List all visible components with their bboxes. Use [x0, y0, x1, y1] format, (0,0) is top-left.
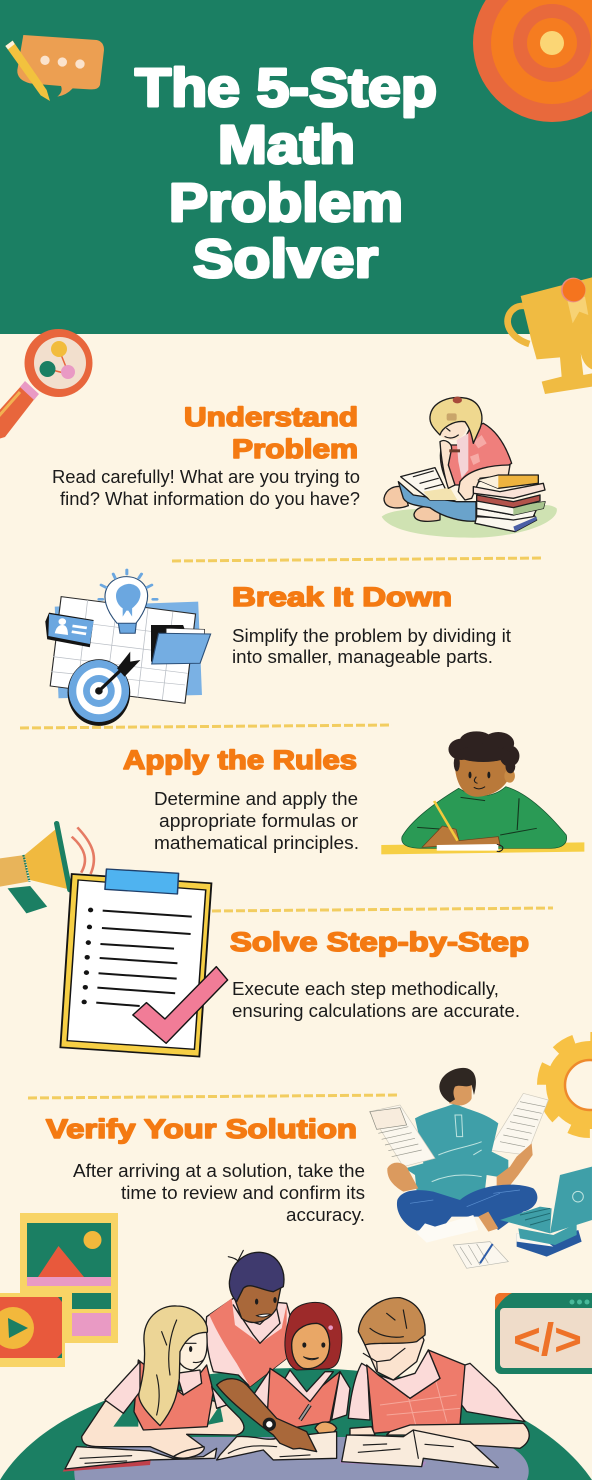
student: dark-haired boy	[206, 1250, 290, 1387]
divider: dashed line 4	[28, 1095, 400, 1098]
heading: solve step by step: Solve Step-by-Step	[230, 927, 529, 957]
student: boy with glasses	[348, 1298, 529, 1448]
illustration: boy writing at desk	[381, 731, 584, 854]
title	[135, 58, 437, 289]
panel: step 5 verify your solution	[46, 1068, 592, 1268]
text: step 3 description: Determine and apply the	[154, 789, 358, 809]
text: step 2 description: into smaller, manageable parts.	[232, 647, 493, 667]
book: centre	[217, 1432, 337, 1460]
text: step 5 description: accuracy.	[286, 1205, 365, 1225]
title: Problem	[169, 173, 403, 233]
icon: code window	[495, 1293, 592, 1374]
panel: step 4 solve step by step	[60, 869, 529, 1057]
text: step 2 description	[232, 626, 511, 667]
icon: megaphone	[0, 823, 94, 913]
text: step 5 description: time to review and confirm its	[121, 1183, 365, 1203]
icon: image card	[20, 1213, 118, 1343]
student: red-haired girl	[253, 1302, 350, 1436]
title: Solver	[193, 229, 378, 289]
illustration: girl reading with book stack	[382, 397, 557, 538]
arm and hand pointing with wristwatch	[217, 1379, 317, 1452]
text: step 5 description	[73, 1161, 365, 1225]
table: grey-purple top	[74, 1437, 529, 1480]
icon: trophy	[508, 277, 592, 394]
illustration: four students studying at table	[0, 1250, 592, 1480]
illustration: person reviewing papers with laptop	[369, 1068, 592, 1268]
text: step 5 description: After arriving at a solution, take the	[73, 1161, 365, 1181]
title: The 5-Step	[135, 58, 437, 118]
open books on table	[63, 1430, 498, 1472]
heading: understand problem: Understand	[184, 402, 358, 432]
title: Math	[218, 115, 355, 175]
heading: apply the rules: Apply the Rules	[123, 745, 357, 775]
heading: understand problem	[184, 402, 358, 464]
heading: verify your solution: Verify Your Solution	[46, 1114, 357, 1144]
icon: gear	[542, 1037, 592, 1133]
panel: step 2 break it down	[45, 570, 511, 726]
divider: dashed line 1	[172, 558, 544, 561]
illustration: plan grid with bulb, folder and target	[45, 570, 211, 726]
icon: magnifying glass	[0, 329, 92, 440]
text: step 3 description	[154, 789, 359, 853]
table: green backdrop	[0, 1368, 592, 1480]
icon: concentric target sun	[473, 0, 592, 122]
icon: speech bubble and pencil	[5, 35, 104, 101]
text: step 1 description: find? What information do you have?	[60, 489, 360, 509]
icon: clipboard checklist	[60, 869, 228, 1057]
header band	[0, 0, 592, 334]
text: step 1 description	[52, 467, 360, 509]
text: step 3 description: mathematical principles.	[154, 833, 359, 853]
text: step 3 description: appropriate formulas or	[159, 811, 358, 831]
icon: video play card	[0, 1293, 65, 1367]
divider: dashed line 2	[20, 725, 392, 728]
heading: break it down: Break It Down	[232, 582, 452, 612]
student: blonde girl	[82, 1306, 244, 1457]
panel: step 3 apply the rules	[0, 731, 584, 913]
icon: code window: </>	[513, 1314, 582, 1365]
book: right	[340, 1430, 498, 1468]
text: step 1 description: Read carefully! What are you trying to	[52, 467, 360, 487]
book: left	[63, 1447, 217, 1472]
panel: step 1 understand problem	[52, 397, 557, 538]
text: step 4 description: ensuring calculations are accurate.	[232, 1001, 520, 1021]
heading: understand problem: Problem	[232, 434, 358, 464]
divider: dashed line 3	[212, 908, 553, 911]
text: step 4 description	[232, 979, 520, 1021]
text: step 2 description: Simplify the problem by dividing it	[232, 626, 511, 646]
text: step 4 description: Execute each step methodically,	[232, 979, 499, 999]
